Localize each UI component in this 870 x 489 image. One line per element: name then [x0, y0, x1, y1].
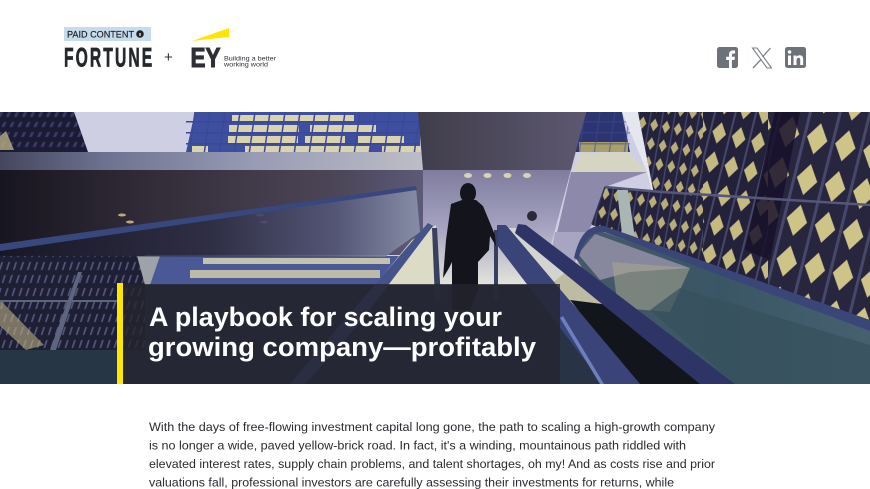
lower base	[0, 284, 870, 384]
pale gap by lower tower	[137, 256, 162, 285]
pale post	[617, 190, 635, 238]
rail one light stripe	[560, 316, 604, 384]
lower blue tower reflection	[150, 256, 420, 285]
canopy band	[0, 152, 423, 170]
paid content tag: PAID CONTENT	[67, 30, 134, 40]
social icons	[717, 47, 806, 68]
intro paragraph	[149, 420, 716, 489]
lower left tower	[0, 255, 145, 350]
canopy ceiling	[0, 170, 423, 255]
black escalator steps	[570, 300, 700, 384]
left glass balustrade	[0, 187, 420, 257]
pale area by left escalator	[375, 225, 436, 285]
post at rail start	[494, 230, 498, 300]
plus sign: +	[164, 49, 173, 66]
person silhouette	[443, 183, 496, 310]
EY logo: Building a better	[224, 56, 277, 62]
Fortune logo: FORTUNE	[64, 42, 152, 73]
reflected lit windows	[612, 262, 690, 312]
ceiling lights left	[118, 214, 268, 224]
pale column	[622, 112, 665, 243]
title overlay	[123, 284, 560, 384]
EY logo: working world	[223, 62, 268, 68]
right lavender wall	[545, 172, 647, 285]
EY logo: EY	[190, 42, 220, 73]
title: A playbook for scaling your	[149, 302, 502, 332]
left inner rail	[432, 228, 441, 300]
teal plinth	[0, 350, 123, 384]
center escalator rail one	[497, 225, 640, 384]
vertical mullion	[50, 272, 82, 350]
pale glass wedge	[578, 234, 690, 280]
left escalator rail	[290, 223, 433, 384]
pale wall under dashes	[545, 232, 592, 285]
sponsor logos	[64, 27, 277, 73]
right lattice tower	[638, 112, 870, 332]
right glass top rail	[605, 187, 870, 205]
right glass panel	[575, 228, 870, 384]
title	[148, 302, 536, 362]
EY logo	[190, 28, 277, 73]
lit window patch top left	[0, 131, 14, 150]
security camera	[527, 211, 537, 221]
intro paragraph: is no longer a wide, paved yellow-brick road. In fact, it's a winding, mountainous path riddled with	[149, 438, 686, 452]
central pillar	[418, 112, 586, 170]
upper glass pane edge	[592, 187, 605, 224]
upper glass pane beside post	[592, 187, 672, 252]
horizontal mullion	[0, 300, 122, 302]
blue tower	[186, 112, 420, 152]
icon: linkedin	[785, 47, 806, 68]
upper left tower	[0, 112, 88, 152]
dark lower glass shape	[650, 288, 870, 384]
sky	[0, 112, 870, 284]
bright glass between rails	[500, 228, 625, 322]
left handrail	[0, 186, 417, 251]
lit windows lower left	[0, 300, 44, 350]
icon: facebook	[717, 47, 738, 68]
yellow accent bar	[117, 283, 123, 384]
cream ledge	[572, 152, 647, 172]
small tower behind pillar	[575, 112, 630, 152]
intro paragraph: With the days of free-flowing investment capital long gone, the path to scaling a high-growth company	[149, 420, 716, 434]
paid content tag	[64, 27, 151, 41]
ceiling lights centre	[464, 173, 531, 178]
right escalator handrail	[574, 226, 870, 331]
lavender wall	[423, 170, 571, 285]
intro paragraph: elevated interest rates, supply chain problems, and talent shortages, oh my! And as costs rise and prior	[149, 457, 715, 471]
center escalator rail two	[515, 224, 735, 384]
icon: X	[752, 48, 772, 68]
title: growing company—profitably	[148, 332, 536, 362]
windows seen through glass	[550, 262, 620, 318]
hero photo: escalator	[0, 112, 870, 384]
